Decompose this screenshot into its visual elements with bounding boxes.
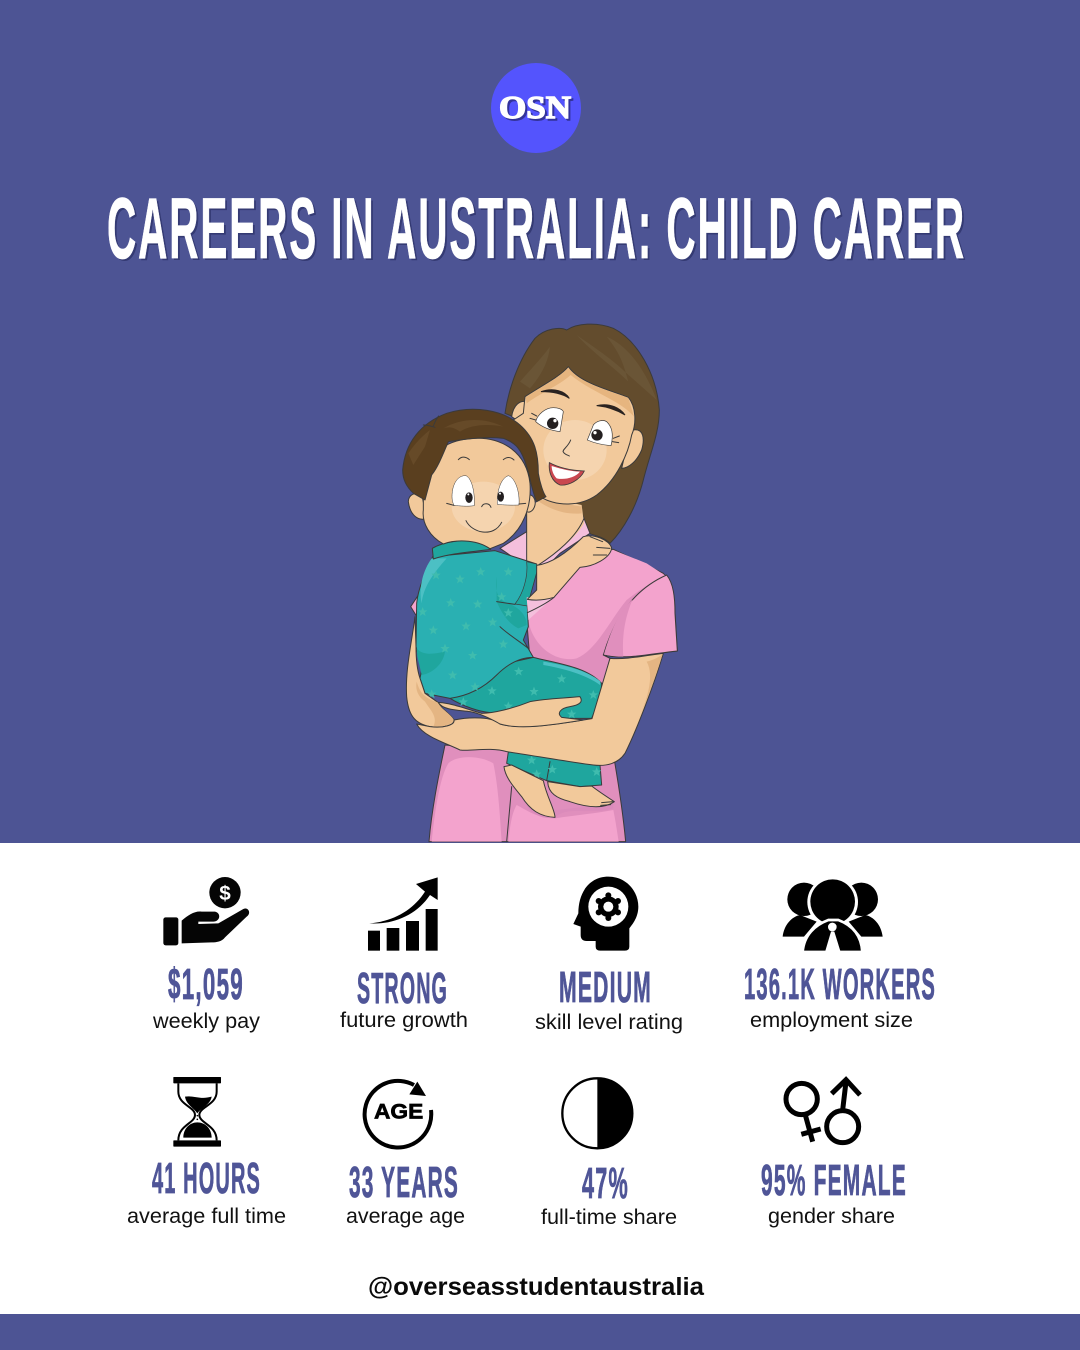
illustration: mother holding child <box>403 324 677 842</box>
text: 95% FEMALE <box>761 1156 907 1205</box>
stat: average full time hours <box>127 1077 286 1228</box>
value: $1,059 <box>168 960 244 1009</box>
label: gender share <box>768 1205 895 1228</box>
stat: employment size <box>744 877 936 1032</box>
icon: head with gear <box>573 877 638 951</box>
stat: future growth <box>340 877 468 1032</box>
logo: OSN <box>501 91 573 127</box>
icon: half-filled circle <box>562 1078 632 1148</box>
baby's arm and head <box>403 409 612 620</box>
stat: skill level <box>535 877 683 1034</box>
woman's right arm across front <box>417 653 663 765</box>
stat: average full time hours: 41 HOURS <box>152 1154 261 1203</box>
icon: hourglass <box>173 1077 221 1147</box>
social handle: @overseasstudentaustralia <box>368 1273 705 1301</box>
icon: hand holding coin: $ <box>219 882 231 905</box>
stats panel background <box>0 843 1080 1314</box>
woman's dress <box>411 549 677 842</box>
label: weekly pay <box>152 1010 261 1033</box>
woman's neck, collar and face <box>500 367 643 567</box>
stat: weekly pay <box>152 877 261 1033</box>
label: average age <box>346 1205 465 1228</box>
footer band <box>0 1314 1080 1350</box>
icon: group of people <box>783 877 883 952</box>
label: skill level rating <box>535 1011 683 1034</box>
icon: age cycle <box>365 1081 431 1148</box>
feet <box>527 803 613 818</box>
stat: average age: 33 YEARS <box>349 1158 459 1207</box>
logo: OSN <box>499 89 571 125</box>
stat: full-time share <box>541 1078 677 1229</box>
stat: skill level: MEDIUM <box>559 963 652 1012</box>
label: future growth <box>340 1009 468 1032</box>
icon: hand holding coin <box>163 877 249 945</box>
stat: future growth: STRONG <box>357 964 448 1013</box>
woman's hair, back <box>505 324 659 543</box>
label: employment size <box>750 1009 913 1032</box>
stat: gender share <box>761 1080 907 1228</box>
icon: rising bar chart <box>368 877 438 951</box>
icon: gender symbols <box>786 1080 860 1143</box>
stat: average age <box>346 1081 465 1228</box>
stat: full-time share: 47% <box>582 1159 629 1208</box>
baby's body: pyjama top and trousers <box>406 551 663 818</box>
label: average full time <box>127 1205 286 1228</box>
icon: age cycle: AGE <box>374 1098 423 1123</box>
woman's left arm behind baby <box>406 617 454 727</box>
header background panel <box>0 0 1080 843</box>
logo <box>491 63 581 153</box>
label: full-time share <box>541 1206 677 1229</box>
